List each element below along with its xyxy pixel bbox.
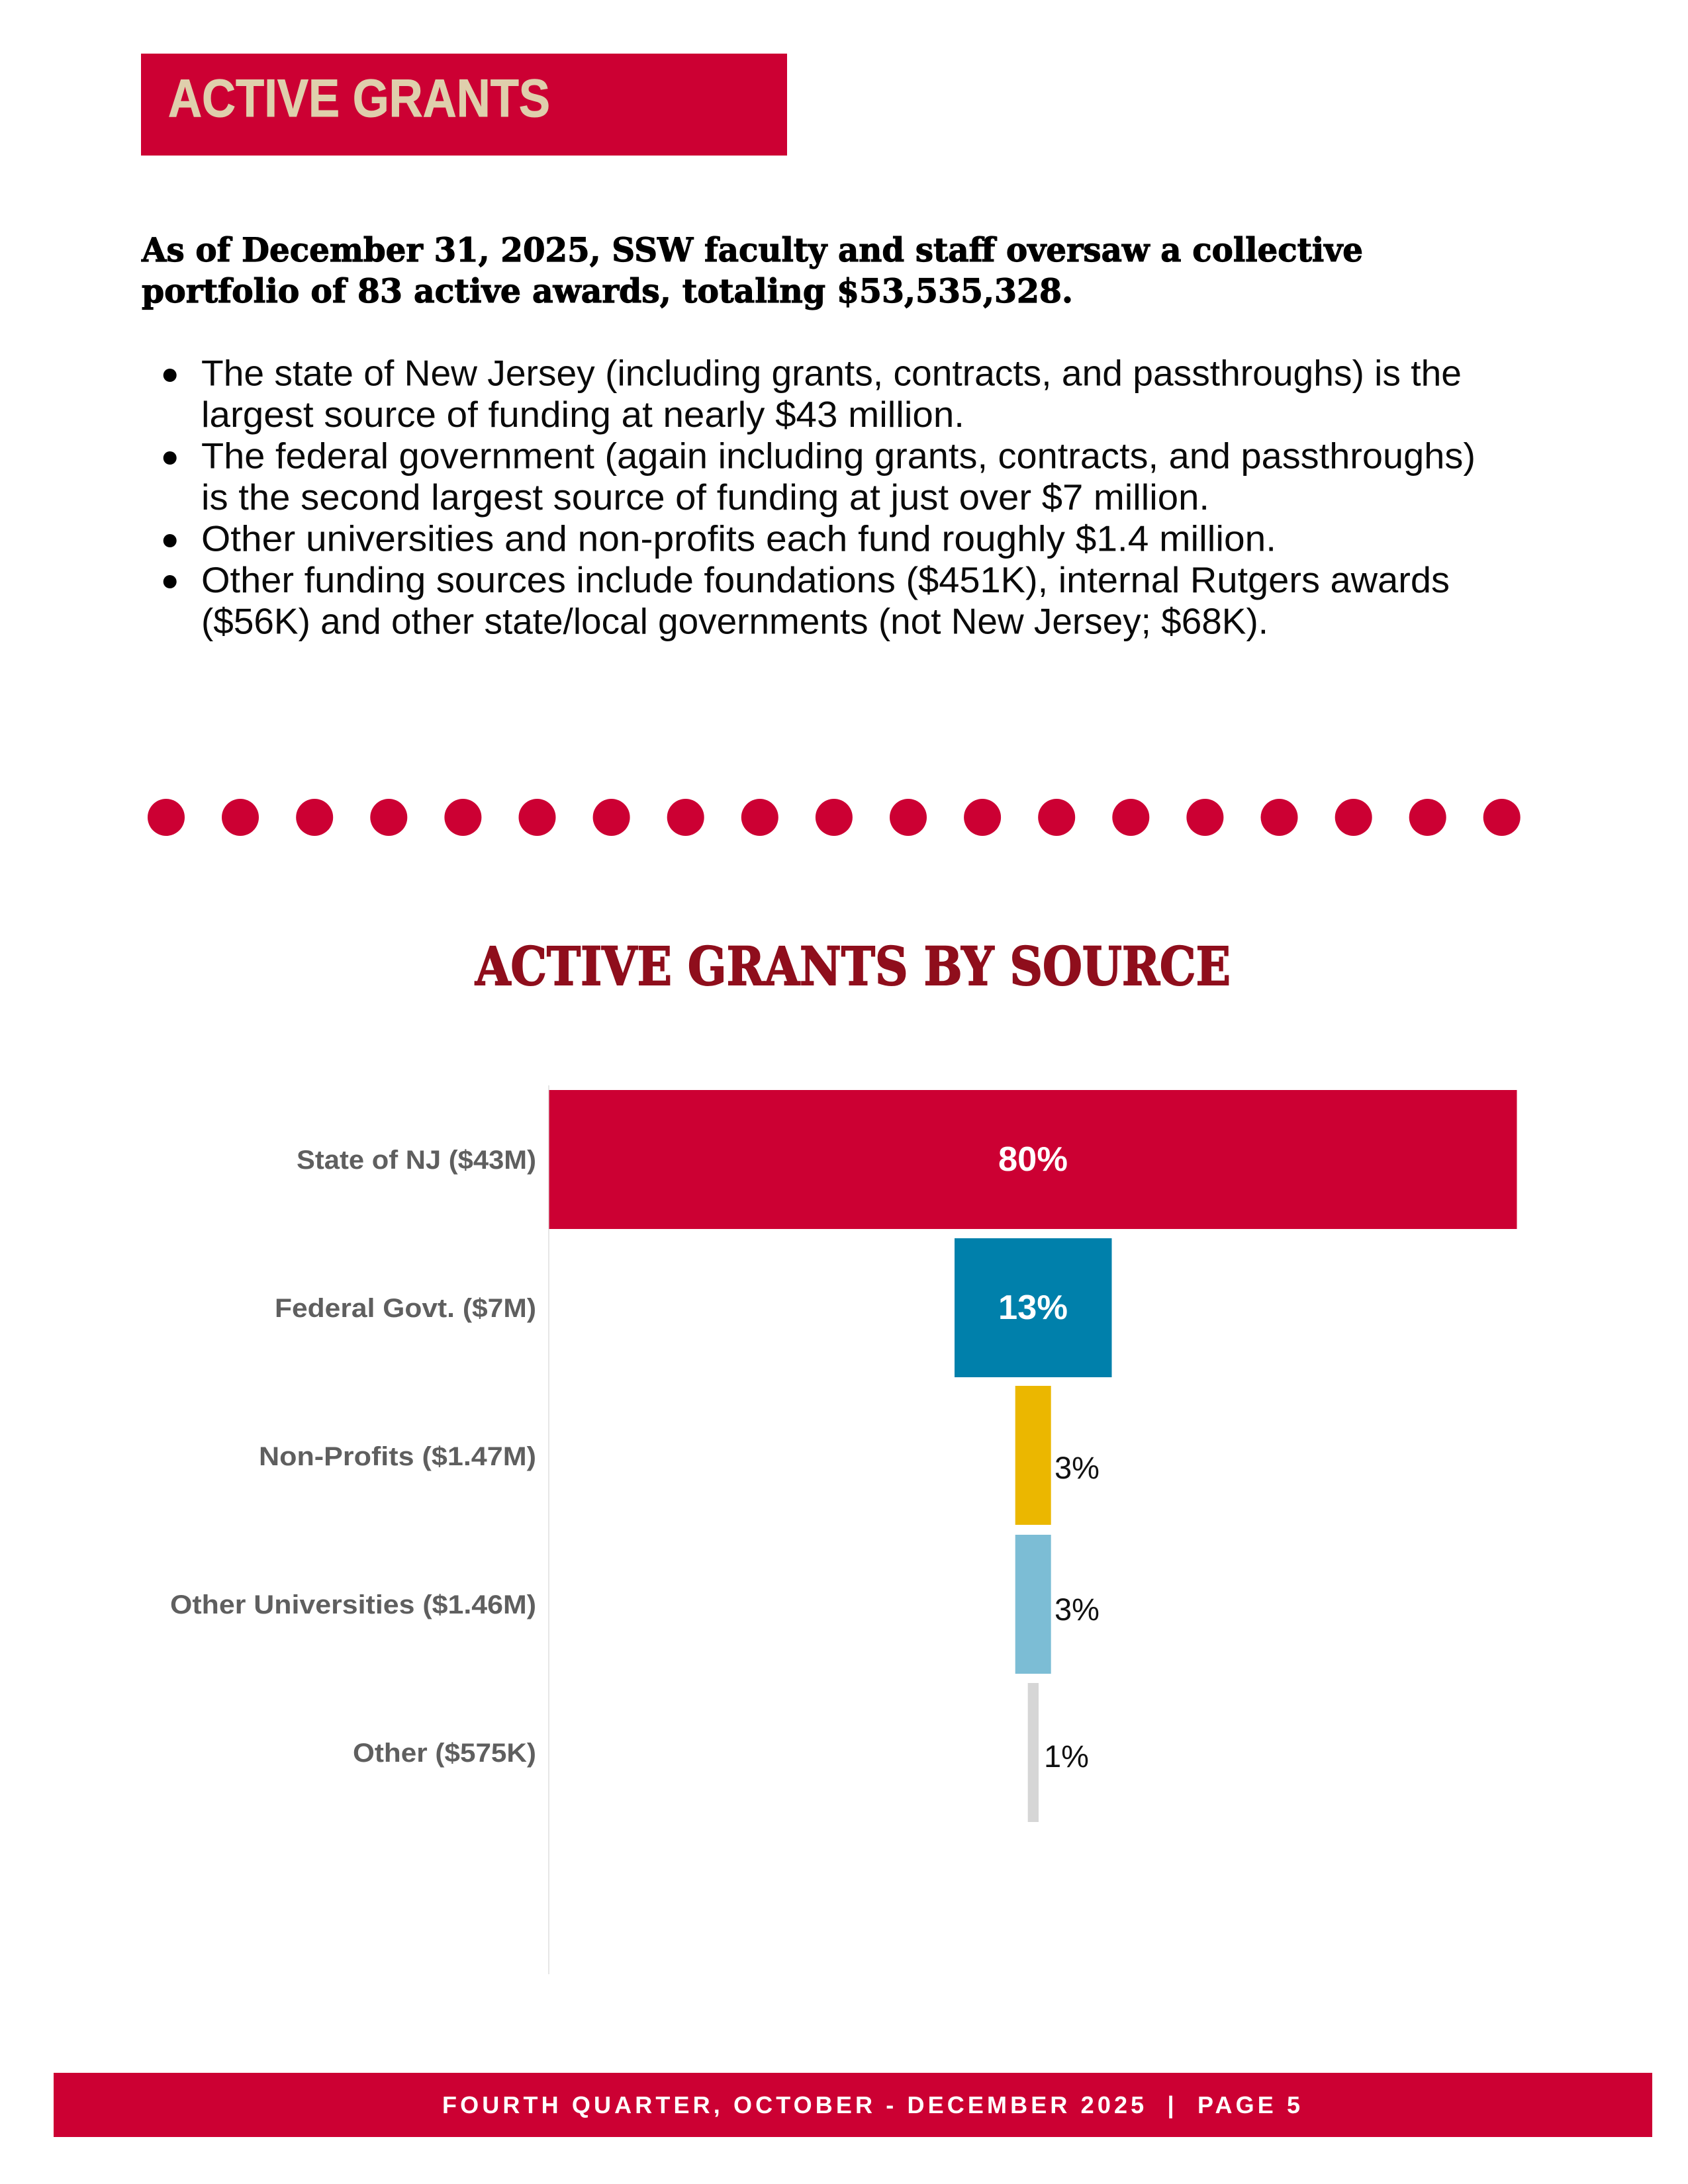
bullet list: Other funding sources include foundations ($451K), internal Rutgers awards bbox=[201, 559, 1450, 600]
footer bar bbox=[54, 2073, 1652, 2137]
bullet list: largest source of funding at nearly $43 million. bbox=[201, 394, 964, 435]
bullet list: The federal government (again including grants, contracts, and passthroughs) bbox=[201, 435, 1476, 477]
intro statement: portfolio of 83 active awards, totaling $53,535,328. bbox=[142, 271, 1073, 310]
intro statement bbox=[141, 230, 1363, 310]
bullet list: The state of New Jersey (including grants, contracts, and passthroughs) is the bbox=[201, 353, 1462, 394]
bar: Federal Govt. bbox=[275, 1238, 1112, 1377]
bar: Other Universities: Other Universities ($1.46M) bbox=[170, 1590, 536, 1619]
bar: Other Universities: 3% bbox=[1055, 1592, 1100, 1627]
bar: State of NJ: State of NJ ($43M) bbox=[297, 1146, 536, 1175]
bar: Non-Profits: 3% bbox=[1055, 1450, 1100, 1485]
bar: Federal Govt.: Federal Govt. ($7M) bbox=[275, 1294, 536, 1323]
bar: Federal Govt.: 13% bbox=[998, 1289, 1068, 1327]
bullet list: is the second largest source of funding at just over $7 million. bbox=[201, 477, 1209, 518]
bar: Non-Profits: Non-Profits ($1.47M) bbox=[259, 1442, 536, 1471]
bullet list: ($56K) and other state/local governments (not New Jersey; $68K). bbox=[201, 600, 1268, 641]
header banner bbox=[141, 54, 787, 156]
bar chart: active grants by source bbox=[170, 1085, 1517, 1974]
bar: State of NJ: 80% bbox=[998, 1140, 1068, 1179]
bar: State of NJ bbox=[297, 1090, 1517, 1229]
bar: Other bbox=[353, 1683, 1089, 1822]
bar: Other: 1% bbox=[1044, 1739, 1089, 1774]
dotted divider bbox=[148, 799, 1521, 836]
bar: Non-Profits bbox=[259, 1386, 1100, 1525]
bullet list bbox=[164, 353, 1476, 641]
intro statement: As of December 31, 2025, SSW faculty and staff oversaw a collective bbox=[141, 230, 1363, 269]
chart title: ACTIVE GRANTS BY SOURCE bbox=[475, 935, 1231, 997]
banner title: ACTIVE GRANTS bbox=[168, 69, 550, 128]
bar: Other Universities bbox=[170, 1535, 1100, 1674]
bar: Other: Other ($575K) bbox=[353, 1739, 536, 1768]
bullet list: Other universities and non-profits each fund roughly $1.4 million. bbox=[201, 518, 1276, 559]
footer text: FOURTH QUARTER, OCTOBER - DECEMBER 2025 | PAGE 5 bbox=[442, 2091, 1300, 2119]
